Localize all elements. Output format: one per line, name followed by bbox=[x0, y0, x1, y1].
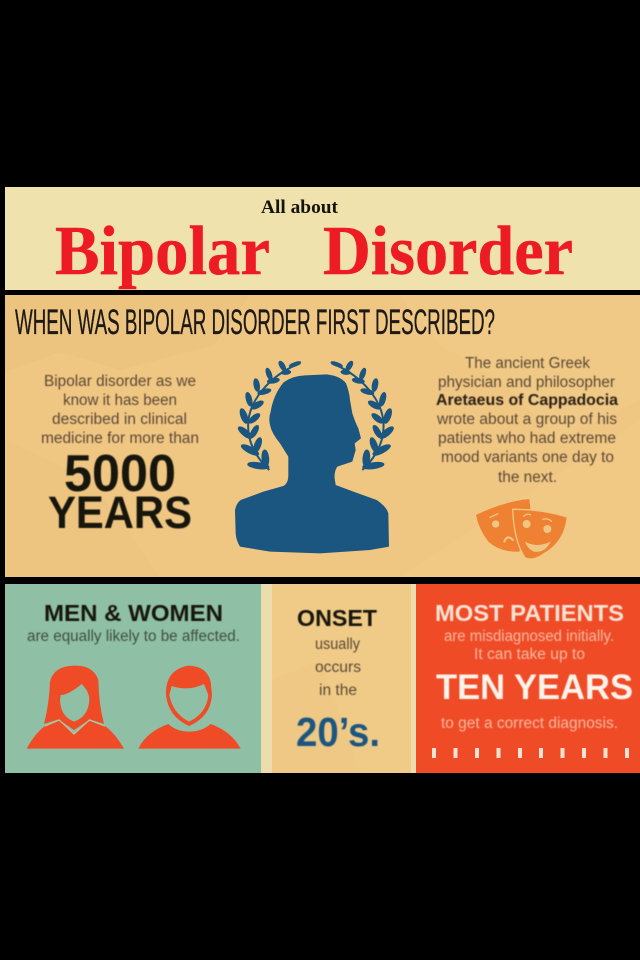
icon: left laurel branch bbox=[237, 360, 301, 470]
text: usually occurs in the: usually bbox=[315, 636, 360, 653]
title: bipolar disorder bbox=[55, 213, 573, 290]
heading: most patients: MOST PATIENTS bbox=[435, 600, 624, 626]
text block: history intro: described in clinical bbox=[52, 411, 187, 428]
text: misdiagnosed: are misdiagnosed initially. bbox=[444, 628, 614, 645]
text block: aretaeus of cappadocia: mood variants one day to bbox=[441, 449, 614, 466]
heading: onset: ONSET bbox=[297, 605, 377, 631]
icon: man bbox=[138, 666, 241, 749]
icon: theatre masks bbox=[476, 499, 567, 559]
text: misdiagnosed bbox=[444, 628, 614, 663]
stat: 20's: 20’s. bbox=[296, 709, 380, 755]
text block: aretaeus of cappadocia: Aretaeus of Cappadocia bbox=[436, 392, 618, 409]
text block: aretaeus of cappadocia: the next. bbox=[498, 469, 557, 486]
stat: 5000 years: YEARS bbox=[48, 487, 192, 538]
panel: onset bbox=[261, 584, 416, 773]
text: misdiagnosed: It can take up to bbox=[474, 646, 585, 663]
text block: history intro: medicine for more than bbox=[41, 430, 199, 447]
text: all about: All about bbox=[261, 198, 339, 218]
text block: aretaeus of cappadocia: physician and philosopher bbox=[438, 374, 615, 391]
icon: woman bbox=[27, 666, 124, 749]
text block: aretaeus of cappadocia: patients who had extreme bbox=[438, 430, 616, 447]
text: correct diagnosis: to get a correct diagnosis. bbox=[441, 715, 618, 732]
icon: sad mask bbox=[476, 499, 531, 552]
text: usually occurs in the: in the bbox=[319, 682, 357, 699]
panel: men and women bbox=[5, 584, 261, 773]
text block: history intro bbox=[41, 373, 199, 447]
timeline ticks bbox=[432, 748, 629, 758]
panel: when was bipolar disorder first described bbox=[5, 295, 640, 577]
title: bipolar disorder: Bipolar bbox=[55, 213, 270, 290]
icon: bust bbox=[235, 374, 389, 553]
text: usually occurs in the: occurs bbox=[315, 659, 361, 676]
text block: aretaeus of cappadocia: wrote about a group of his bbox=[436, 411, 617, 428]
panel: header banner bbox=[5, 187, 640, 290]
title: bipolar disorder: Disorder bbox=[323, 213, 573, 290]
stat: ten years: TEN YEARS bbox=[436, 668, 633, 707]
heading: men & women: MEN & WOMEN bbox=[44, 600, 223, 626]
text: equally likely: are equally likely to be affected. bbox=[27, 628, 240, 645]
text block: aretaeus of cappadocia bbox=[436, 355, 618, 486]
stat: 5000 years: 5000 bbox=[64, 445, 176, 503]
icon: laurel wreath and bust silhouette bbox=[235, 360, 395, 553]
icon: happy mask bbox=[513, 509, 567, 559]
text: usually occurs in the bbox=[315, 636, 361, 699]
text block: history intro: know it has been bbox=[63, 392, 177, 409]
stat: 5000 years bbox=[48, 445, 192, 538]
text block: history intro: Bipolar disorder as we bbox=[44, 373, 196, 390]
panel: most patients bbox=[416, 584, 640, 773]
icon: right laurel branch bbox=[330, 360, 395, 470]
text block: aretaeus of cappadocia: The ancient Greek bbox=[465, 355, 590, 372]
